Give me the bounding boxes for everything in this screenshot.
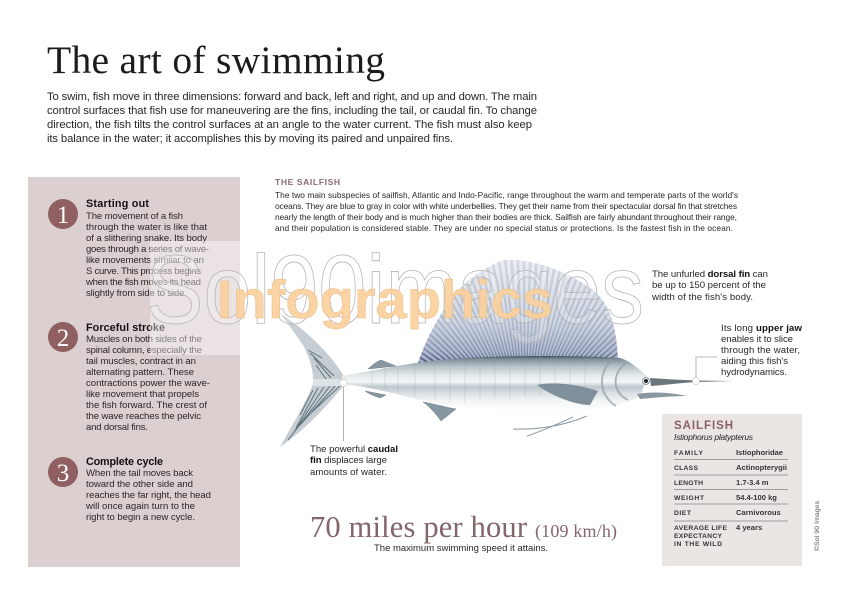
panel: steps background — [28, 177, 240, 567]
step 2 text: the wave reaches the pelvic — [86, 411, 201, 422]
callout: upper jaw: enables it to slice — [721, 334, 793, 345]
step 1 text: S curve. This process begins — [86, 266, 201, 277]
caudal fin — [280, 313, 345, 447]
body — [342, 356, 648, 412]
text block: sailfish description: and their population is considered stable. They are under no special status or protections. Is the fastest fish in the ocean. — [275, 223, 733, 233]
icon: number 1: 1 — [57, 202, 69, 229]
text block: sailfish description: nearly the length of their body and is much higher than their bodies are thick. Sailfish are fairly abundant throughout their range, — [275, 212, 737, 222]
fact table: DIET — [674, 510, 692, 517]
step 1 heading: Starting out — [86, 198, 149, 210]
text block: introduction: To swim, fish move in three dimensions: forward and back, left and right, and up and down. The main — [47, 91, 537, 103]
head and bill — [637, 378, 733, 399]
step 2 text — [86, 334, 210, 433]
text block: introduction: its balance in the water; it accomplishes this by moving its paired and unpaired fins. — [47, 133, 453, 145]
step 1 text: when the fish moves its head — [85, 277, 201, 288]
step 2 text: spinal column, especially the — [86, 345, 202, 356]
icon: number 3: 3 — [57, 460, 69, 487]
step 3 text: reaches the far right, the head — [86, 490, 211, 501]
step 3 text: will once again turn to the — [85, 501, 195, 512]
illustration: sailfish — [280, 260, 732, 447]
statistic: top speed — [310, 510, 617, 554]
pectoral fin — [537, 383, 598, 405]
text block: sailfish description: oceans. They are blue to gray in color with white underbellies. They get their name from their spectacular dorsal fin that stretches — [275, 201, 737, 211]
watermark: Sol90images: Sol90images — [146, 235, 644, 344]
callout: caudal fin — [310, 379, 398, 478]
body stripes — [372, 356, 585, 403]
step 2 text: tail muscles, contract in an — [86, 356, 196, 367]
callout: upper jaw — [692, 323, 803, 385]
step 1 text: of a slithering snake. Its body — [86, 233, 207, 244]
fact table: Carnivorous — [736, 508, 781, 517]
step 3 text — [85, 468, 211, 523]
fact box heading: SAILFISH — [674, 420, 733, 432]
fact table: WEIGHT — [674, 495, 705, 502]
statistic: top speed: 70 miles per hour — [310, 510, 527, 544]
step 3: complete cycle — [48, 456, 211, 523]
icon: number 1 — [48, 199, 78, 229]
text block: introduction: direction, the fish tilts the control surfaces at an angle to the water current. The fish must also keep — [47, 119, 532, 131]
step 3 text: toward the other side and — [86, 479, 193, 490]
fact table: CLASS — [674, 465, 698, 472]
step 1 text: like movements similar to an — [86, 255, 204, 266]
step 1: starting out — [48, 198, 209, 299]
callout: dorsal fin — [651, 269, 768, 303]
step 1 text: goes through a series of wave- — [86, 244, 209, 255]
icon: number 2: 2 — [57, 325, 69, 352]
fact table — [674, 448, 788, 548]
fact table: FAMILY — [674, 450, 703, 457]
fact table: IN THE WILD — [674, 541, 722, 548]
fact table: EXPECTANCY — [674, 533, 722, 540]
fact table: 1.7-3.4 m — [736, 478, 769, 487]
callout: dorsal fin: width of the fish's body. — [651, 292, 753, 303]
fact table: Actinopterygii — [736, 463, 787, 472]
text block: introduction: control surfaces that fish use for maneuvering are the fins, including the tail, or caudal fin. To change — [47, 105, 537, 117]
step 2 text: the fish forward. The crest of — [86, 400, 207, 411]
fact table: AVERAGE LIFE — [674, 525, 727, 532]
watermark: wash — [150, 241, 240, 355]
step 2 text: Muscles on both sides of the — [86, 334, 202, 345]
step 1 text — [85, 211, 209, 299]
credit: ©Sol 90 Images — [813, 500, 821, 551]
scientific name: Istiophorus platypterus — [674, 432, 754, 442]
step 1 text: slightly from side to side. — [86, 288, 187, 299]
step 2 text: like movement that propels — [86, 389, 199, 400]
fact table: Istiophoridae — [736, 448, 783, 457]
text block: sailfish description: The two main subspecies of sailfish, Atlantic and Indo-Pacific, range throughout the warm and temperate parts of the world's — [275, 190, 738, 200]
dorsal sail — [418, 260, 618, 363]
callout: upper jaw: hydrodynamics. — [721, 367, 787, 378]
gill cover — [602, 360, 628, 406]
callout: caudal fin: amounts of water. — [310, 467, 387, 478]
statistic: top speed: (109 km/h) — [535, 521, 617, 542]
icon: number 3 — [48, 457, 78, 487]
step 1 text: The movement of a fish — [86, 211, 183, 222]
text block: sailfish description — [275, 190, 738, 233]
ventral filaments — [513, 416, 587, 436]
step 3 heading: Complete cycle — [86, 456, 163, 468]
callout: upper jaw: aiding this fish's — [721, 356, 788, 367]
text block: introduction — [47, 91, 537, 145]
icon: number 2 — [48, 322, 78, 352]
fact table: 4 years — [736, 523, 762, 532]
watermark: Infographics: Infographics — [217, 270, 553, 330]
small fins — [365, 360, 456, 421]
step 1 text: through the water is like that — [86, 222, 207, 233]
callout: dorsal fin: be up to 150 percent of the — [652, 280, 766, 291]
title: The art of swimming — [47, 38, 385, 82]
heading: the sailfish: THE SAILFISH — [275, 177, 340, 187]
callout: upper jaw: Its long upper jaw — [721, 323, 803, 334]
step 3 text: right to begin a new cycle. — [86, 512, 195, 523]
statistic: top speed: The maximum swimming speed it attains. — [374, 543, 548, 554]
step 3 text: When the tail moves back — [86, 468, 193, 479]
callout: caudal fin: fin displaces large — [310, 455, 387, 466]
step 2 text: alternating pattern. These — [86, 367, 194, 378]
panel: sailfish fact box — [662, 414, 802, 566]
step 2 text: contractions power the wave- — [86, 378, 210, 389]
fact table: 54.4-100 kg — [736, 493, 777, 502]
callout: upper jaw: through the water, — [721, 345, 800, 356]
step 2 text: and dorsal fins. — [86, 422, 148, 433]
fact table: LENGTH — [674, 480, 703, 487]
step 2 heading: Forceful stroke — [86, 322, 165, 334]
callout: dorsal fin: The unfurled dorsal fin can — [652, 269, 768, 280]
step 2: forceful stroke — [48, 322, 210, 433]
callout: caudal fin: The powerful caudal — [310, 444, 398, 455]
